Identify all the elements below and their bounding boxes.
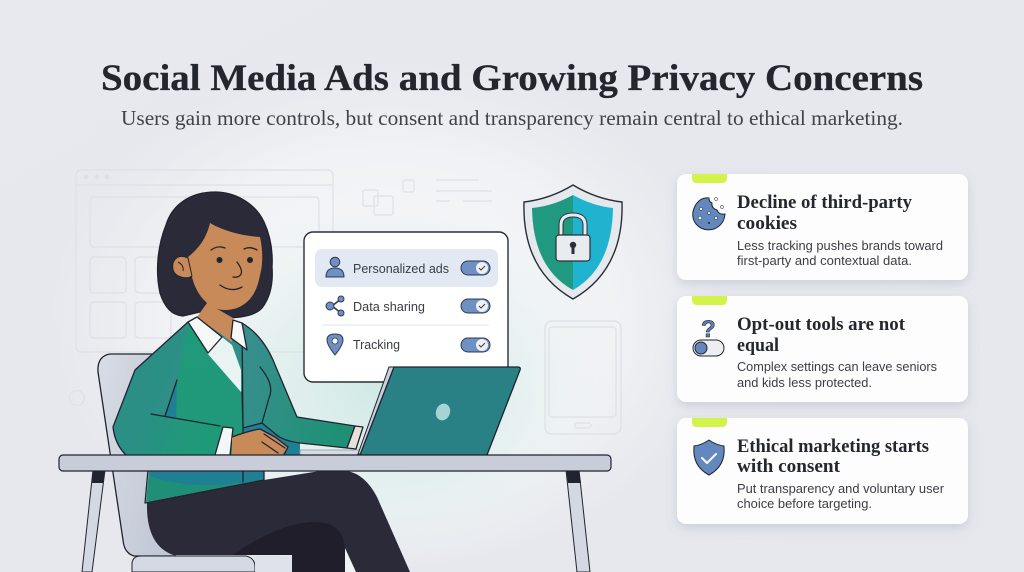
body text xyxy=(737,360,937,390)
toggle 3 xyxy=(461,338,490,352)
body text: and kids less protected. xyxy=(737,376,872,390)
shirt xyxy=(207,337,241,392)
chair xyxy=(98,354,292,572)
person xyxy=(113,192,410,572)
body text: Less tracking pushes brands toward xyxy=(737,239,943,253)
label: data sharing: Data sharing xyxy=(353,299,425,314)
label: tracking: Tracking xyxy=(353,337,400,352)
laptop xyxy=(300,367,520,455)
accent tab xyxy=(692,296,727,305)
right cuff xyxy=(347,426,363,449)
card 1: third-party cookies xyxy=(677,174,968,280)
title: Social Media Ads and Growing Privacy Concerns xyxy=(101,58,923,99)
body text: Complex settings can leave seniors xyxy=(737,360,937,374)
icon: shield with check xyxy=(694,440,724,475)
desk leg left xyxy=(82,470,105,572)
icon: question and toggle: ? xyxy=(701,316,716,343)
heading xyxy=(737,315,906,356)
body text: first-party and contextual data. xyxy=(737,254,912,268)
icon: cookie xyxy=(693,197,725,230)
icon: share xyxy=(326,296,344,316)
heading: cookies xyxy=(737,214,797,234)
heading: with consent xyxy=(737,457,841,477)
heading: Opt-out tools are not xyxy=(737,315,906,335)
subtitle: Users gain more controls, but consent and transparency remain central to ethical marketing. xyxy=(121,106,903,130)
pants xyxy=(147,471,410,572)
icon: person xyxy=(326,257,344,277)
face xyxy=(173,223,262,310)
desk xyxy=(59,455,611,471)
hair xyxy=(158,192,272,318)
toggle 1 xyxy=(461,261,490,275)
icon: question and toggle xyxy=(693,316,724,356)
illustration: background wireframes xyxy=(70,170,621,434)
left cuff xyxy=(215,427,233,455)
heading: Decline of third-party xyxy=(737,193,913,213)
accent tab xyxy=(692,418,727,427)
icon: location pin xyxy=(327,334,343,355)
jacket xyxy=(113,322,355,503)
neck xyxy=(197,303,233,342)
heading xyxy=(737,193,913,234)
toggle 2 xyxy=(461,299,490,313)
card 2: opt-out tools xyxy=(677,296,968,402)
settings panel xyxy=(304,232,508,382)
heading: Ethical marketing starts xyxy=(737,437,929,457)
desk leg caps xyxy=(92,470,581,483)
heading xyxy=(737,437,929,477)
desk leg right xyxy=(566,470,590,572)
icon: security shield with padlock xyxy=(524,185,622,299)
body text: choice before targeting. xyxy=(737,497,872,511)
body text xyxy=(737,239,943,268)
accent tab xyxy=(692,174,727,183)
card 3: ethical marketing xyxy=(677,418,968,524)
label: personalized ads: Personalized ads xyxy=(353,261,449,276)
row highlight: personalized ads xyxy=(315,249,498,287)
heading: equal xyxy=(737,336,779,356)
body text xyxy=(737,482,944,511)
body text: Put transparency and voluntary user xyxy=(737,482,944,496)
hand xyxy=(232,429,288,455)
collar xyxy=(188,317,247,353)
